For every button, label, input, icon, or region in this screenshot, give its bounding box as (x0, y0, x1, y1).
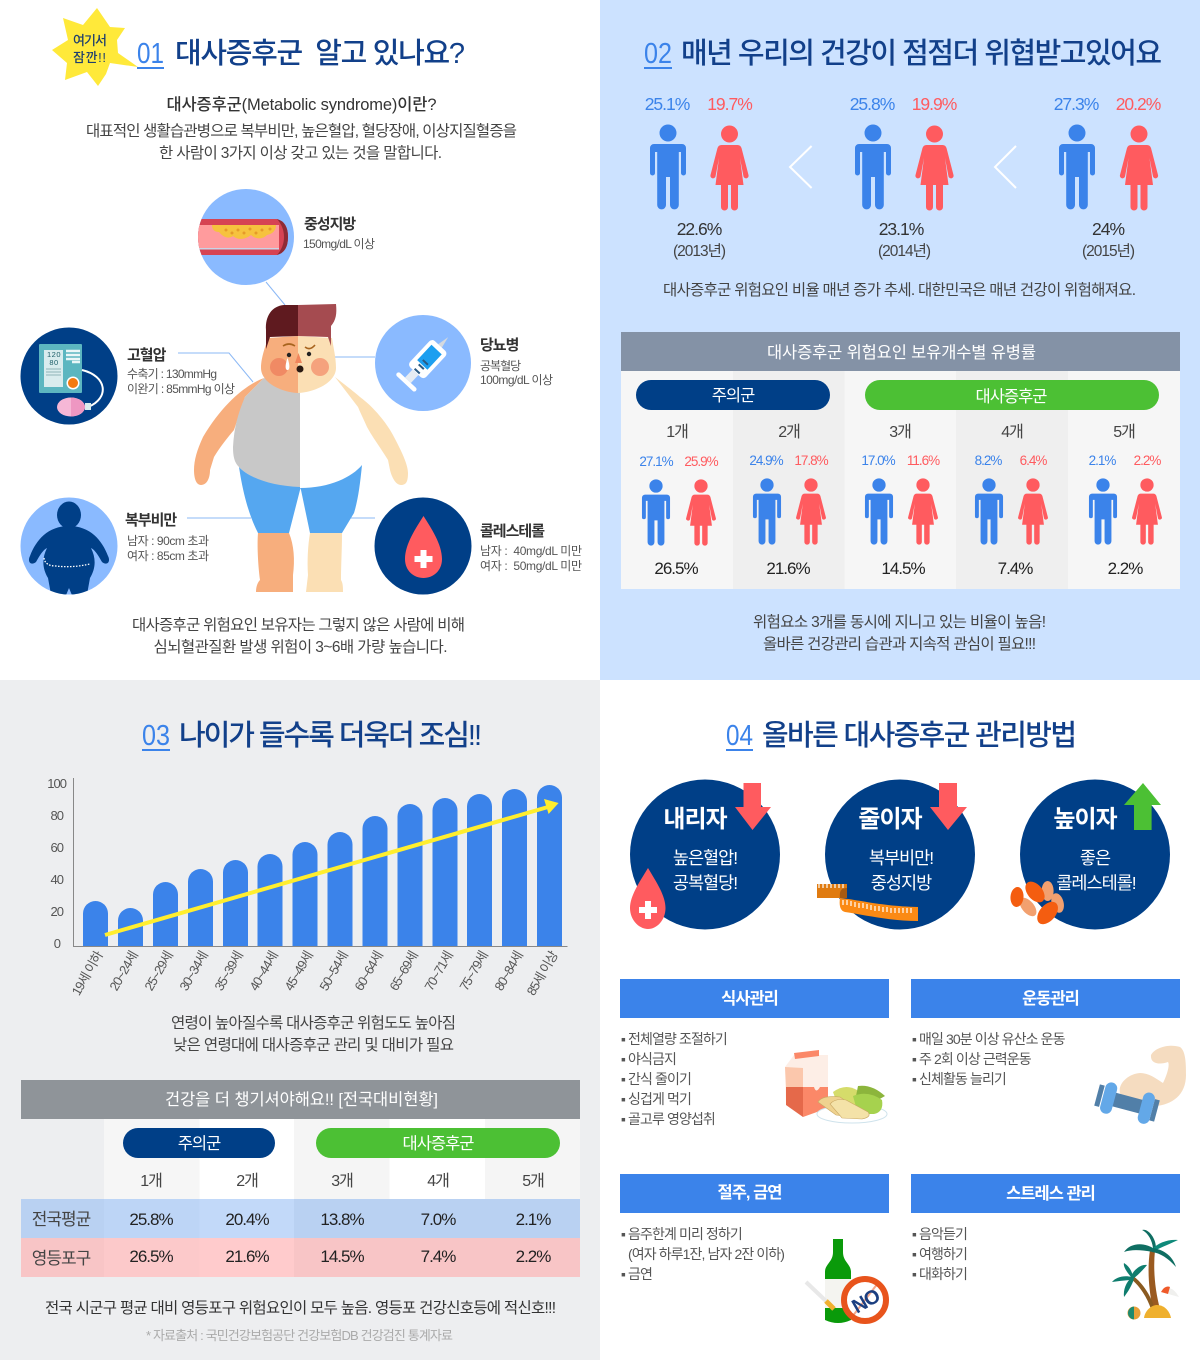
gender percentages: 6.4% (1020, 453, 1047, 468)
circle: lower: 공복혈당! (673, 873, 737, 893)
x axis labels: 65~69세 (386, 949, 421, 993)
row: national average: 전국평균 (32, 1210, 91, 1229)
x axis labels: 75~79세 (456, 949, 491, 993)
closing text 03: 전국 시군구 평균 대비 영등포구 위험요인이 모두 높음. 영등포 건강신호등에 적신호!!! (45, 1299, 555, 1317)
label: abdominal obesity: 남자 : 90cm 초과 (127, 534, 209, 548)
card: diet: ▪ 골고루 영양섭취 (621, 1111, 715, 1127)
circle: reduce: 복부비만! (869, 848, 933, 868)
caption 03 (171, 1014, 455, 1054)
totals: 7.4% (998, 559, 1033, 578)
card: exercise: ▪ 매일 30분 이상 유산소 운동 (912, 1031, 1066, 1047)
label: high blood pressure: 이완기 : 85mmHg 이상 (127, 382, 235, 396)
x axis labels: 45~49세 (281, 949, 316, 993)
y axis labels: 20 (51, 904, 64, 919)
card: exercise: ▪ 주 2회 이상 근력운동 (912, 1051, 1032, 1067)
card: exercise (911, 979, 1186, 1126)
connector lines (178, 282, 375, 518)
row: national average: 25.8% (129, 1210, 173, 1229)
badge: burst: 여기서 (73, 33, 106, 48)
icon: food (785, 1050, 887, 1123)
row: yeongdeungpo (21, 1238, 580, 1277)
icon: blood pressure monitor: 80 (49, 358, 59, 367)
panel: 01 what is metabolic syndrome (20, 8, 582, 654)
icon: cholesterol drop (374, 498, 472, 594)
figures: 2014: (2014년) (878, 242, 931, 260)
y axis labels (47, 776, 67, 951)
card: stress: 스트레스 관리 (1006, 1184, 1095, 1203)
figures: 2014: 25.8% (850, 94, 895, 114)
row: yeongdeungpo: 21.6% (225, 1247, 269, 1266)
column labels: 3개 (889, 423, 911, 441)
card: diet (620, 979, 889, 1127)
gender percentages: 11.6% (907, 453, 940, 468)
card: diet: ▪ 싱겁게 먹기 (621, 1091, 691, 1107)
gender figures (642, 478, 1162, 546)
label: abdominal obesity: 복부비만 (125, 512, 177, 529)
figures: 2015: 24% (1092, 219, 1124, 239)
x axis labels: 25~29세 (141, 949, 176, 993)
totals: 26.5% (654, 559, 698, 578)
icon: blood pressure monitor: 120 (47, 350, 61, 359)
panel: 04 management (600, 680, 1200, 1360)
figures: 2013: 22.6% (677, 219, 722, 239)
label: triglyceride (303, 216, 375, 251)
row: national average (21, 1199, 580, 1238)
pill: metabolic syndrome group (316, 1128, 560, 1158)
figures: 2014: 23.1% (879, 219, 924, 239)
x axis labels: 80~84세 (491, 949, 526, 993)
card: stress: ▪ 여행하기 (912, 1246, 967, 1262)
figures: 2013: 25.1% (645, 94, 690, 114)
totals: 14.5% (881, 559, 925, 578)
label: diabetes (480, 337, 553, 387)
figures: 2014: 19.9% (912, 94, 957, 114)
arrow: down (735, 783, 771, 830)
label: cholesterol: 여자 : 50mg/dL 미만 (480, 559, 582, 573)
intro text: 대표적인 생활습관병으로 복부비만, 높은혈압, 혈당장애, 이상지질혈증을 (86, 122, 517, 140)
y axis labels: 40 (51, 872, 64, 887)
row: national average: 20.4% (225, 1210, 269, 1229)
figures: 2015: (2015년) (1082, 242, 1135, 260)
closing text 02: 위험요소 3개를 동시에 지니고 있는 비율이 높음! (753, 613, 1045, 631)
circle: reduce (817, 780, 975, 930)
x axis labels: 20~24세 (106, 949, 141, 993)
x axis labels: 40~44세 (246, 949, 281, 993)
heading 03: 나이가 들수록 더욱더 조심!! (179, 719, 481, 752)
pill: caution group: 주의군 (178, 1134, 221, 1153)
figures: 2015: 20.2% (1116, 94, 1161, 114)
arrow: chevron (790, 146, 812, 188)
circle: reduce: 중성지방 (871, 873, 932, 893)
intro text: 대사증후군(Metabolic syndrome)이란? (166, 95, 436, 114)
circle: raise: 높이자 (1053, 806, 1118, 833)
column labels: 2개 (778, 423, 800, 441)
label: high blood pressure (127, 347, 235, 396)
card: diet: ▪ 간식 줄이기 (621, 1071, 691, 1087)
heading 02: 매년 우리의 건강이 점점더 위협받고있어요 (681, 37, 1161, 70)
pill: metabolic syndrome group (865, 380, 1159, 410)
bars (83, 785, 562, 946)
intro text: 한 사람이 3가지 이상 갖고 있는 것을 말합니다. (159, 144, 441, 162)
x axis labels: 85세 이상 (524, 948, 561, 998)
table: national comparison (21, 1080, 580, 1277)
table: prevalence by risk factor count (621, 332, 1180, 589)
column labels: 4개 (1001, 423, 1023, 441)
gender percentages: 25.9% (684, 454, 719, 469)
row: national average: 7.0% (421, 1210, 456, 1229)
column labels: 1개 (140, 1172, 162, 1190)
label: triglyceride: 중성지방 (304, 216, 356, 233)
bar chart: risk by age (47, 776, 568, 998)
body figure (194, 304, 408, 592)
caption 02: 대사증후군 위험요인 비율 매년 증가 추세. 대한민국은 매년 건강이 위험해져요. (663, 281, 1135, 299)
closing text 02: 올바른 건강관리 습관과 지속적 관심이 필요!!! (763, 635, 1035, 653)
heading 04: 04 (726, 720, 753, 752)
card: alcohol and smoking: 절주, 금연 (718, 1183, 781, 1202)
label: diabetes: 100mg/dL 이상 (480, 373, 553, 387)
card: diet: ▪ 야식금지 (621, 1051, 676, 1067)
x axis labels: 60~64세 (351, 949, 386, 993)
icon: no drinking no smoking (806, 1239, 886, 1323)
column labels: 4개 (427, 1172, 449, 1190)
icon: no drinking no smoking: NO (848, 1285, 884, 1318)
x axis labels (69, 948, 561, 998)
column labels: 2개 (236, 1172, 258, 1190)
row: yeongdeungpo: 영등포구 (32, 1249, 91, 1268)
circle: reduce: 줄이자 (858, 806, 923, 833)
panel: 02 yearly risk trend (600, 0, 1200, 680)
gender percentages: 2.1% (1089, 453, 1116, 468)
label: diabetes: 당뇨병 (480, 337, 519, 354)
totals (654, 559, 1143, 578)
heading 04: 올바른 대사증후군 관리방법 (762, 719, 1076, 752)
figures: 2013 (645, 94, 752, 260)
heading 03: 03 (142, 720, 170, 752)
icon: triglyceride artery (197, 189, 294, 285)
column labels (666, 423, 1135, 441)
label: diabetes: 공복혈당 (480, 359, 521, 373)
label: high blood pressure: 고혈압 (127, 347, 167, 364)
circle: raise: 콜레스테롤! (1056, 873, 1136, 893)
figures: 2015: 27.3% (1054, 94, 1099, 114)
panel: 03 age risk (0, 680, 600, 1360)
x axis labels: 70~71세 (421, 949, 456, 993)
label: cholesterol: 콜레스테롤 (480, 523, 545, 540)
circle: raise: 좋은 (1080, 848, 1111, 868)
arrow: chevron (995, 146, 1016, 188)
label: abdominal obesity (125, 512, 209, 563)
closing text 01: 심뇌혈관질환 발생 위험이 3~6배 가량 높습니다. (154, 638, 446, 656)
x axis labels: 19세 이하 (69, 948, 106, 998)
totals: 21.6% (766, 559, 810, 578)
arrow: down (930, 783, 967, 830)
pill: caution group (636, 380, 830, 410)
card: alcohol and smoking: (여자 하루1잔, 남자 2잔 이하) (628, 1246, 784, 1262)
badge: burst: 잠깐!! (73, 50, 105, 65)
row: yeongdeungpo: 14.5% (320, 1247, 364, 1266)
circle: lower (630, 780, 780, 930)
closing text 01 (132, 616, 464, 656)
icon: syringe (375, 315, 471, 411)
x axis labels: 30~34세 (176, 949, 211, 993)
column labels: 1개 (666, 423, 688, 441)
row: yeongdeungpo: 7.4% (421, 1247, 456, 1266)
icon: blood cells (1010, 878, 1066, 928)
column labels: 5개 (1113, 423, 1135, 441)
totals: 2.2% (1108, 559, 1143, 578)
intro text (86, 95, 517, 162)
y axis labels: 60 (51, 840, 64, 855)
pill: metabolic syndrome group: 대사증후군 (403, 1134, 474, 1153)
gender percentages: 17.8% (794, 453, 829, 468)
label: cholesterol (480, 523, 582, 573)
circle: lower: 내리자 (663, 806, 728, 833)
icon: arm with dumbbell (1093, 1046, 1186, 1126)
icon: palm island (1112, 1230, 1179, 1320)
caption 03: 낮은 연령대에 대사증후군 관리 및 대비가 필요 (173, 1036, 454, 1054)
gender percentages: 17.0% (861, 453, 896, 468)
heading 01: 대사증후군 알고 있나요? (175, 37, 465, 70)
icon: blood pressure monitor (20, 328, 118, 424)
arrow: trend (105, 799, 559, 935)
card: alcohol and smoking: ▪ 음주한계 미리 정하기 (621, 1226, 742, 1242)
row: national average: 2.1% (516, 1210, 551, 1229)
caption 03: 연령이 높아질수록 대사증후군 위험도도 높아짐 (171, 1014, 455, 1032)
icon: drop (630, 868, 666, 929)
card: exercise: 운동관리 (1022, 989, 1079, 1008)
column labels: 5개 (522, 1172, 544, 1190)
x axis labels: 35~39세 (211, 949, 246, 993)
gender percentages: 2.2% (1134, 453, 1161, 468)
closing text 02 (753, 613, 1045, 653)
table: prevalence by risk factor count: 대사증후군 위험요인 보유개수별 유병률 (767, 343, 1036, 362)
badge: burst (52, 8, 138, 86)
gender percentages: 8.2% (975, 453, 1002, 468)
icon: abdominal obesity silhouette (20, 498, 118, 600)
card: diet: ▪ 전체열량 조절하기 (621, 1031, 727, 1047)
card: stress: ▪ 대화하기 (912, 1266, 967, 1282)
column labels: 3개 (331, 1172, 353, 1190)
row: yeongdeungpo: 26.5% (129, 1247, 173, 1266)
gender percentages: 27.1% (639, 454, 674, 469)
row: yeongdeungpo: 2.2% (516, 1247, 551, 1266)
figures: 2013: 19.7% (707, 94, 752, 114)
arrow: up (1124, 783, 1161, 830)
y axis labels: 80 (51, 808, 64, 823)
heading 02: 02 (644, 38, 672, 70)
closing text 01: 대사증후군 위험요인 보유자는 그렇지 않은 사람에 비해 (132, 616, 464, 634)
label: high blood pressure: 수축기 : 130mmHg (127, 367, 216, 381)
table: national comparison: 건강을 더 챙기셔야해요!! [전국대비현황] (165, 1090, 437, 1109)
card: diet: 식사관리 (721, 989, 778, 1008)
card: stress (911, 1174, 1180, 1320)
figures: 2014 (850, 94, 957, 260)
gender percentages (639, 453, 1161, 469)
icon: tape measure (817, 884, 918, 921)
label: cholesterol: 남자 : 40mg/dL 미만 (480, 544, 582, 558)
figures: 2015 (1054, 94, 1161, 260)
circle: raise (1010, 780, 1170, 930)
gender percentages: 24.9% (749, 453, 784, 468)
column labels (140, 1172, 544, 1190)
label: abdominal obesity: 여자 : 85cm 초과 (127, 549, 209, 563)
row: national average: 13.8% (320, 1210, 364, 1229)
source: * 자료출처 : 국민건강보험공단 건강보험DB 건강검진 통계자료 (146, 1328, 453, 1343)
card: exercise: ▪ 신체활동 늘리기 (912, 1071, 1006, 1087)
pill: metabolic syndrome group: 대사증후군 (976, 387, 1047, 406)
card: alcohol and smoking: ▪ 금연 (621, 1266, 652, 1282)
card: alcohol and smoking (620, 1174, 889, 1323)
pill: caution group (123, 1128, 275, 1158)
y axis labels: 0 (54, 936, 61, 951)
circle: lower: 높은혈압! (673, 848, 737, 868)
card: stress: ▪ 음악듣기 (912, 1226, 967, 1242)
y axis labels: 100 (47, 776, 67, 791)
heading 01: 01 (137, 38, 164, 70)
pill: caution group: 주의군 (712, 386, 755, 405)
x axis labels: 50~54세 (316, 949, 351, 993)
figures: 2013: (2013년) (673, 242, 726, 260)
label: triglyceride: 150mg/dL 이상 (303, 237, 375, 251)
